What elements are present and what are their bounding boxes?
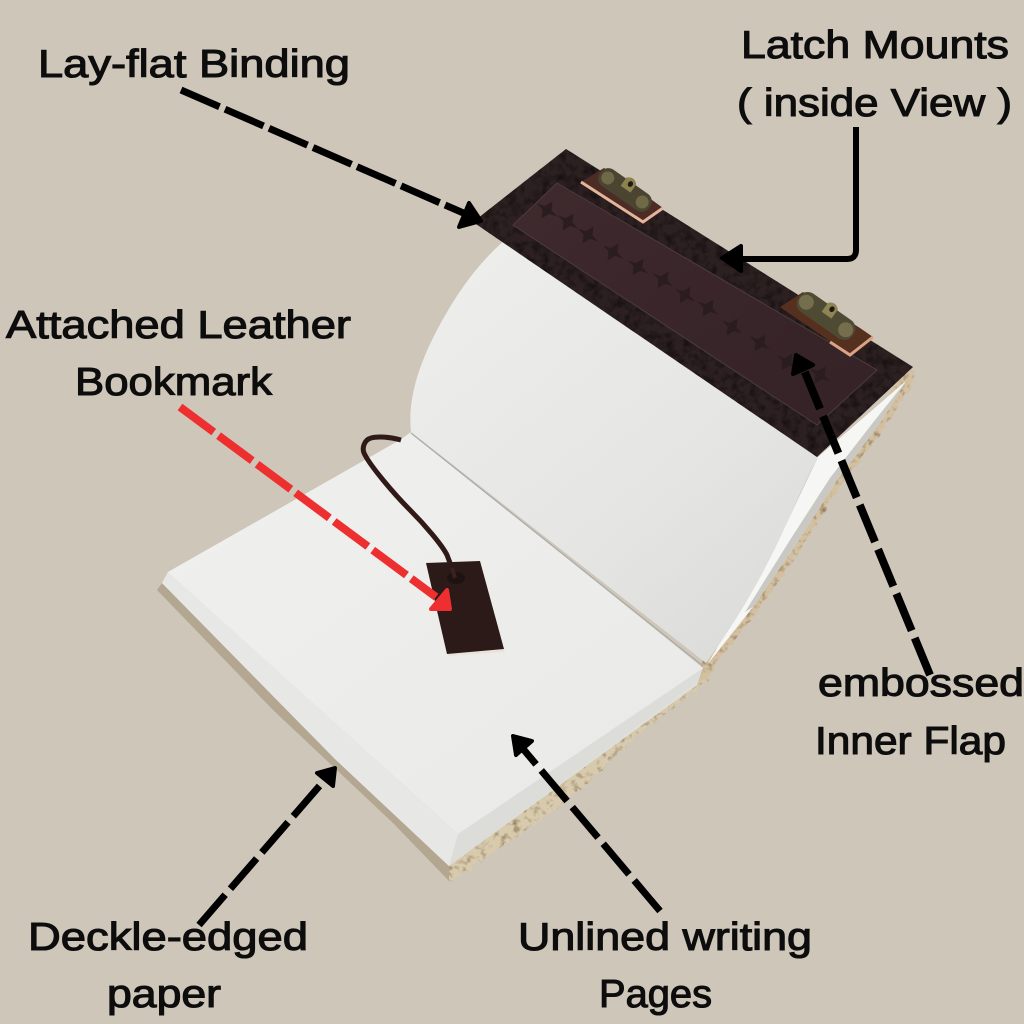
label: Unlined writing Pages: Unlined writing [518,916,812,959]
latch mount: right [780,285,873,355]
label: Latch Mounts (inside View): ( inside View ) [737,82,1012,125]
arrow: embossed inner flap [793,355,930,675]
label: Attached Leather Bookmark [6,304,351,404]
latch mount: left [581,161,663,222]
label: Attached Leather Bookmark: Bookmark [75,361,273,404]
label: Deckle-edged paper: paper [107,973,221,1016]
upper page [410,240,818,663]
label: embossed Inner Flap [815,662,1024,763]
deckled edge on the lower block [443,680,707,882]
label: Deckle-edged paper: Deckle-edged [28,916,308,959]
label: Lay-flat Binding: Lay-flat Binding [38,43,350,86]
arrow: unlined writing pages [513,736,660,911]
embossed flower row [531,195,836,390]
label: Deckle-edged paper [28,916,308,1016]
thin cover edge at left [157,583,449,881]
arrow: lay-flat binding [181,90,481,227]
arrow: deckle-edged paper [199,768,335,925]
arrow: attached leather bookmark [180,407,450,609]
deckled edge on the right-hand block [694,370,914,692]
label: Latch Mounts (inside View) [737,24,1012,125]
arrow: latch mounts [722,127,856,271]
lower page stack [162,440,703,866]
leather inner flap [473,149,913,457]
label: Unlined writing Pages [518,916,812,1016]
lower page [168,432,703,834]
leather bookmark [363,437,505,656]
label: Latch Mounts (inside View): Latch Mounts [741,24,1009,67]
gutter line [411,433,703,666]
right side page block [707,380,907,665]
journal photo [157,149,914,882]
label: Unlined writing Pages: Pages [599,973,712,1016]
label: embossed Inner Flap: embossed [818,662,1024,705]
embossed panel [513,183,877,425]
label: Attached Leather Bookmark: Attached Leather [6,304,351,347]
label: embossed Inner Flap: Inner Flap [815,720,1006,763]
